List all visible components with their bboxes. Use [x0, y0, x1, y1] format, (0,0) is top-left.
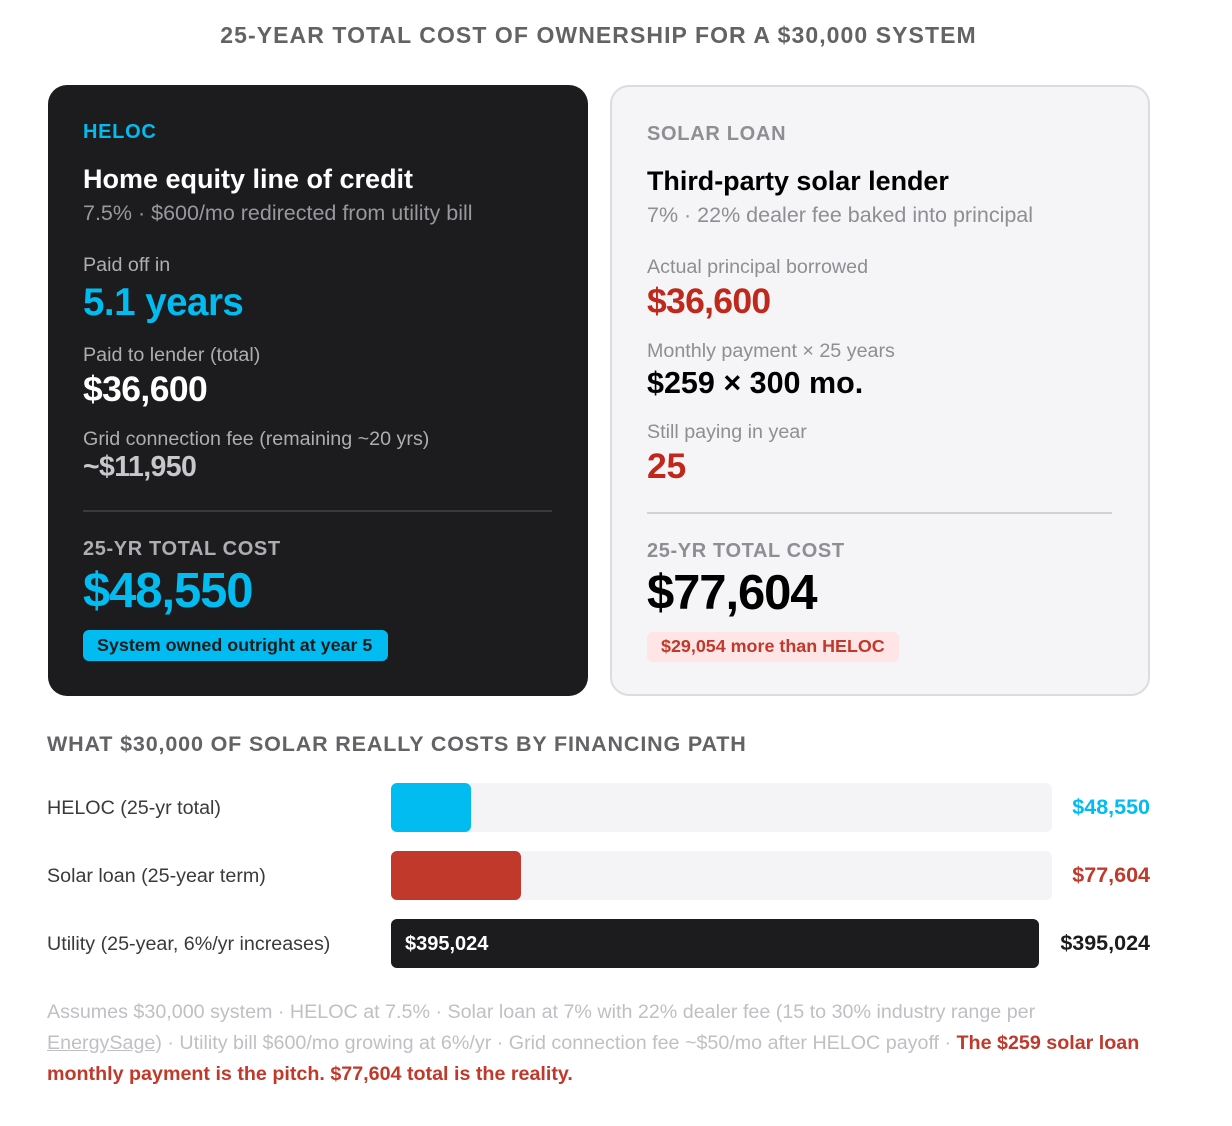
- paid to lender value: $36,600: [83, 369, 207, 409]
- row: solar loan: $77,604: [1072, 862, 1150, 886]
- monthly value: $259 × 300 mo.: [647, 366, 863, 400]
- solar subtitle: 7% · 22% dealer fee baked into principal: [647, 202, 1033, 226]
- difference badge: $29,054 more than HELOC: [661, 636, 885, 656]
- row: utility: Utility (25-year, 6%/yr increases): [47, 932, 330, 954]
- solar label: SOLAR LOAN: [647, 123, 786, 145]
- title: 25-YEAR TOTAL COST OF OWNERSHIP FOR A $30,000 SYSTEM: [220, 22, 977, 48]
- row: HELOC: [47, 783, 1150, 832]
- solar heading: Third-party solar lender: [647, 166, 949, 196]
- footnote: [47, 1000, 1139, 1085]
- divider: [83, 510, 552, 512]
- total label: 25-YR TOTAL COST: [83, 538, 281, 560]
- row: solar loan: Solar loan (25-year term): [47, 864, 266, 886]
- divider: [647, 512, 1112, 514]
- outright badge: System owned outright at year 5: [97, 635, 372, 655]
- grid fee value: ~$11,950: [83, 451, 196, 483]
- panel: HELOC: [48, 84, 588, 696]
- chart heading: WHAT $30,000 OF SOLAR REALLY COSTS BY FINANCING PATH: [47, 732, 747, 756]
- HELOC heading: Home equity line of credit: [83, 164, 413, 194]
- panel: solar loan: [610, 84, 1150, 696]
- footnote: EnergySage) · Utility bill $600/mo growing at 6%/yr · Grid connection fee ~$50/mo after HELOC payoff · The $259 solar loan: [47, 1032, 1139, 1054]
- footnote: Assumes $30,000 system · HELOC at 7.5% · Solar loan at 7% with 22% dealer fee (15 to 30% industry range per: [47, 1000, 1035, 1022]
- row: HELOC: $48,550: [1072, 794, 1150, 818]
- monthly label: Monthly payment × 25 years: [647, 340, 895, 362]
- still paying label: Still paying in year: [647, 421, 807, 443]
- still paying value: 25: [647, 446, 686, 486]
- difference badge: [647, 632, 899, 662]
- bar chart: [47, 783, 1150, 968]
- total value: $48,550: [83, 564, 252, 618]
- row: HELOC: HELOC (25-yr total): [47, 796, 221, 818]
- grid fee label: Grid connection fee (remaining ~20 yrs): [83, 428, 429, 450]
- total label: 25-YR TOTAL COST: [647, 540, 845, 562]
- row: utility: $395,024: [405, 933, 488, 955]
- principal label: Actual principal borrowed: [647, 256, 868, 278]
- paid to lender label: Paid to lender (total): [83, 344, 260, 366]
- paid off value: 5.1 years: [83, 281, 243, 324]
- HELOC subtitle: 7.5% · $600/mo redirected from utility bill: [83, 200, 473, 224]
- row: utility: $395,024: [1060, 930, 1150, 954]
- row: utility: [47, 919, 1150, 968]
- outright badge: [83, 630, 388, 661]
- paid off label: Paid off in: [83, 254, 170, 276]
- principal value: $36,600: [647, 280, 770, 320]
- footnote: monthly payment is the pitch. $77,604 total is the reality.: [47, 1063, 573, 1085]
- HELOC label: HELOC: [83, 120, 156, 142]
- row: solar loan: [47, 851, 1150, 900]
- total value: $77,604: [647, 566, 816, 620]
